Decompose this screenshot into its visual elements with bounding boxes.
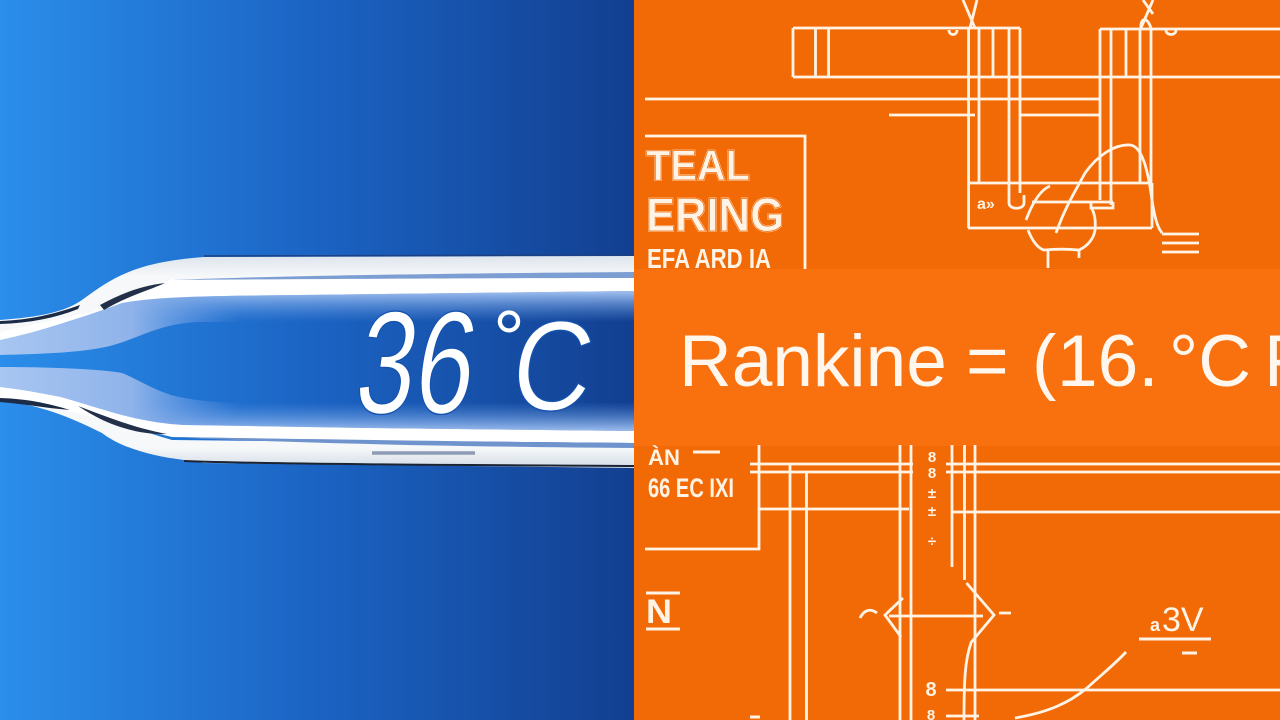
blueprint label: voltage: 3V xyxy=(1162,601,1204,639)
banner: Rankine formula xyxy=(634,269,1280,446)
blueprint label: small caption: EFA ARD IA xyxy=(647,243,771,274)
white band top xyxy=(0,277,634,340)
temperature readout: C xyxy=(505,295,602,438)
blueprint label: N: N xyxy=(646,593,672,631)
blueprint column labels: 8 xyxy=(925,679,937,701)
panel: blue thermometer background xyxy=(0,0,634,720)
formula text: = xyxy=(966,321,1009,402)
blueprint small label: a» xyxy=(977,196,995,213)
glass inner reflection top xyxy=(0,291,634,355)
temperature readout: 36 xyxy=(348,282,487,445)
grey line bottom xyxy=(172,437,634,448)
blueprint column labels: ± xyxy=(928,485,936,502)
formula text: 16. xyxy=(1057,321,1158,402)
blueprint label: code: 66 EC IXI xyxy=(648,473,734,503)
formula text: ( xyxy=(1032,321,1056,402)
glass top edge xyxy=(0,256,634,340)
title box outline xyxy=(645,136,805,270)
blueprint column labels: 8 xyxy=(928,449,936,466)
glass bottom edge xyxy=(0,390,634,468)
blueprint label: AN: ÀN xyxy=(648,445,680,470)
blueprint schematic top xyxy=(645,0,1280,270)
grey line top xyxy=(172,272,634,280)
temperature readout xyxy=(348,282,602,445)
blueprint schematic bottom xyxy=(645,445,1280,720)
glass inner reflection bottom xyxy=(0,367,634,431)
blueprint column labels: ÷ xyxy=(928,533,936,550)
blueprint label: TEAL: TEAL xyxy=(646,142,750,190)
blueprint column labels: ± xyxy=(928,503,936,520)
thermometer xyxy=(0,255,634,468)
blueprint label: ERING: ERING xyxy=(646,188,784,241)
temperature readout: ° xyxy=(493,294,525,383)
blueprint column labels xyxy=(925,449,937,720)
blueprint label: ERING: ERING xyxy=(646,188,784,241)
blueprint column labels: 8 xyxy=(928,465,936,482)
formula text: Rankine xyxy=(679,321,947,402)
panel: orange blueprint background xyxy=(634,0,1280,720)
white band bottom xyxy=(0,387,634,443)
dark reflections bottom xyxy=(0,398,70,410)
formula text: °C xyxy=(1169,321,1251,402)
dark reflections top xyxy=(0,305,80,324)
blueprint label: TEAL: TEAL xyxy=(646,142,750,190)
blueprint label: voltage: a xyxy=(1150,615,1161,635)
